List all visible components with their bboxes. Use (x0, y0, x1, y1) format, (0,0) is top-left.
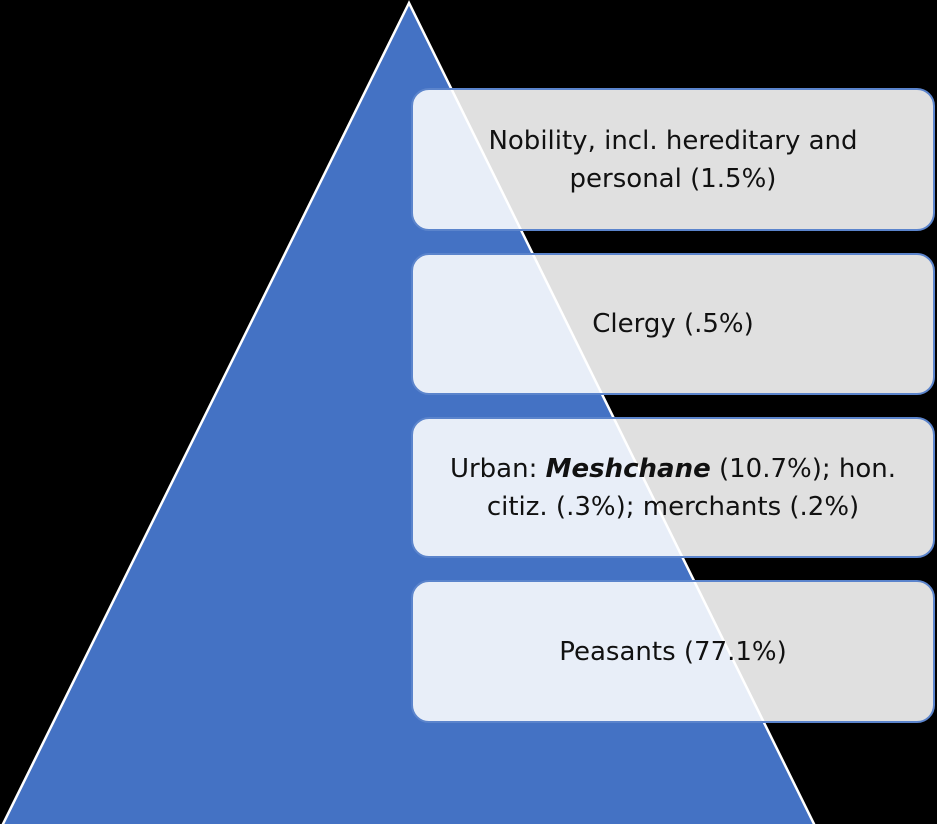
box: peasants (411, 580, 935, 723)
box: urban (411, 417, 935, 558)
box: nobility (411, 88, 935, 231)
box: urban: citiz. (.3%); merchants (.2%) (487, 492, 859, 522)
box: clergy (411, 253, 935, 395)
box: nobility: Nobility, incl. hereditary and (488, 126, 858, 156)
box: peasants: Peasants (77.1%) (559, 636, 787, 666)
box: urban: Urban: Meshchane (10.7%); hon. (450, 454, 896, 484)
box: nobility: personal (1.5%) (570, 164, 776, 194)
box: clergy: Clergy (.5%) (592, 309, 754, 339)
